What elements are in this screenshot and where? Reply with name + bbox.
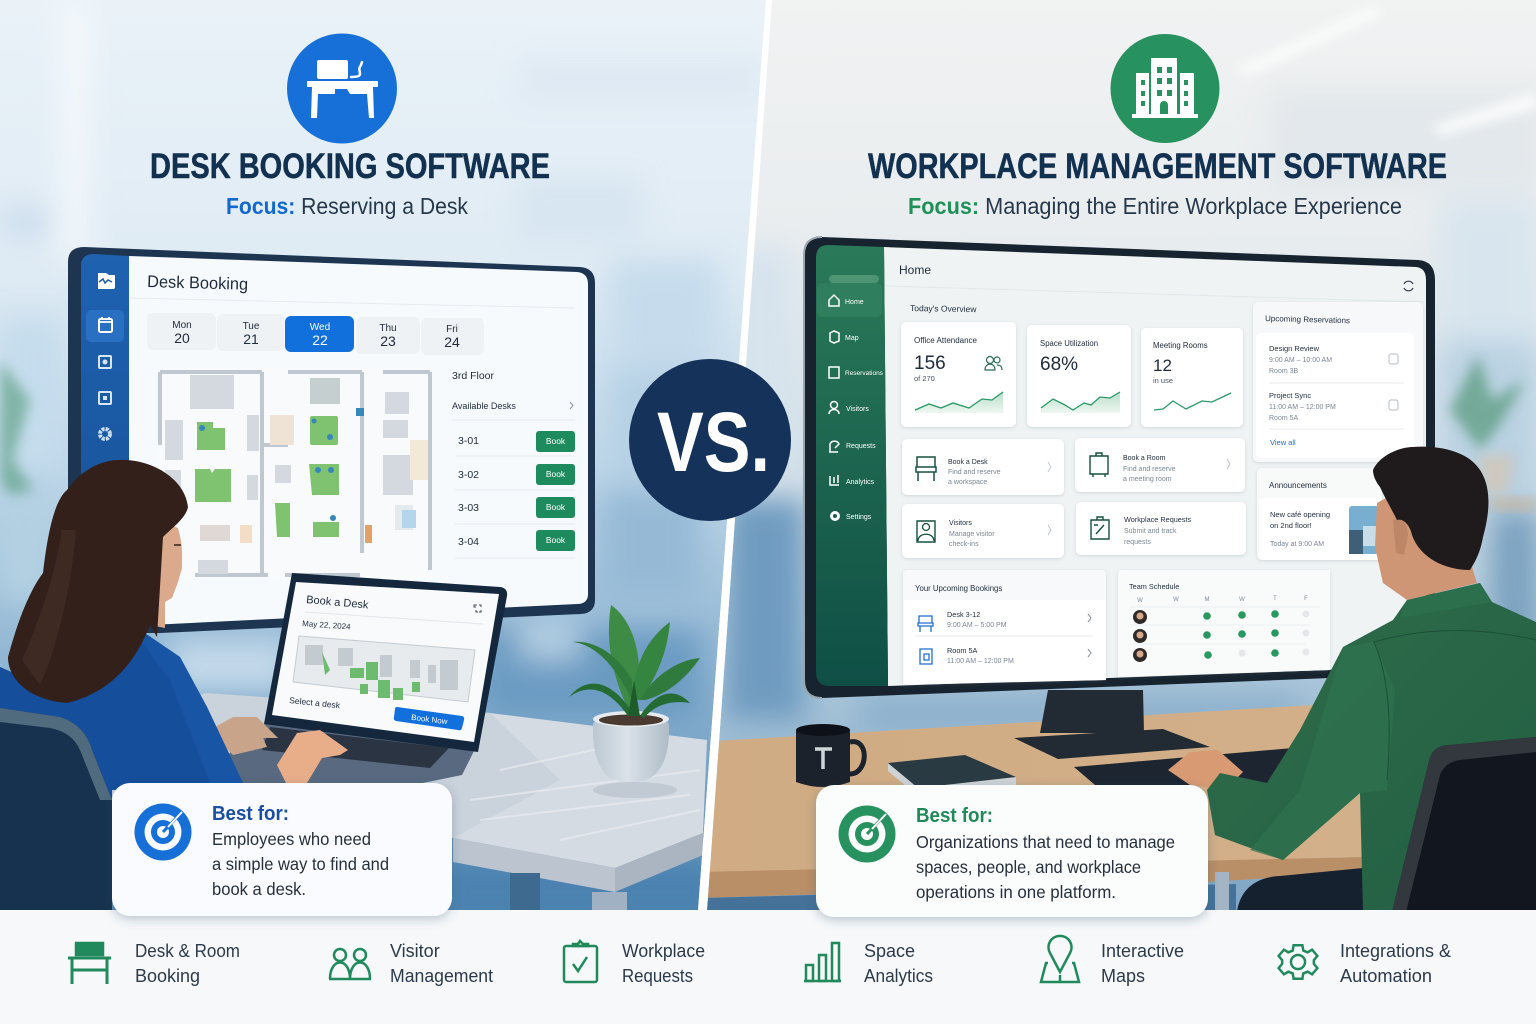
icon: people (329, 949, 371, 979)
hand (1168, 750, 1243, 790)
card: space utilization: 68% (1040, 354, 1078, 375)
monitor frame (68, 247, 595, 633)
title block: desk booking (150, 34, 550, 219)
date selector: Tue (243, 321, 260, 332)
office chair (0, 708, 112, 920)
card: space utilization: Space Utilization (1040, 339, 1098, 348)
icon: building in green circle (1110, 34, 1220, 143)
panel: upcoming reservations: Room 5A (1269, 415, 1299, 422)
icon: gear (1279, 945, 1317, 979)
panel: upcoming reservations: Room 3B (1269, 368, 1299, 375)
floor plan (159, 368, 432, 578)
panel: your upcoming bookings: 9:00 AM – 5:00 PM (947, 622, 1007, 629)
sidebar (816, 245, 888, 686)
office chair (1392, 737, 1536, 912)
date selector (147, 313, 484, 355)
versus badge: VS. (657, 395, 770, 489)
monitor: desk booking app (68, 247, 595, 633)
action: visitors: check-ins (949, 541, 979, 548)
feature: visitor management: Visitor (390, 941, 440, 961)
feature: desk and room booking: Booking (135, 966, 200, 986)
footer strip (0, 910, 1536, 1024)
action: visitors: Visitors (949, 520, 972, 527)
booking list: 3-04 (458, 536, 479, 548)
icon: desk in blue circle (287, 34, 397, 144)
booking list: 3-03 (458, 502, 479, 514)
panel: your upcoming bookings: 11:00 AM – 12:00 PM (947, 658, 1014, 665)
action: visitors: Manage visitor (949, 531, 995, 538)
date selector: 22 (312, 332, 328, 348)
action: book a room: a meeting room (1123, 476, 1172, 483)
booking list: Available Desks (452, 401, 516, 411)
panel: your upcoming bookings (903, 570, 1106, 685)
laptop screen (264, 573, 507, 752)
subheading: focus: Focus: Managing the Entire Workplace Experience (908, 193, 1402, 219)
laptop book now button (394, 707, 464, 730)
booking list: 3-01 (458, 435, 479, 447)
panel: upcoming reservations: View all (1270, 438, 1296, 447)
panel: upcoming reservations: Project Sync (1269, 391, 1311, 400)
panel: your upcoming bookings: Your Upcoming Bookings (915, 584, 1002, 593)
action: workplace requests: Workplace Requests (1124, 515, 1192, 524)
date selector: Mon (172, 320, 192, 331)
feature: workplace requests: Workplace (622, 941, 705, 961)
panel: team schedule: M (1204, 597, 1210, 603)
callout text: Employees who need (212, 829, 371, 849)
action: visitors (902, 504, 1064, 558)
panel: upcoming reservations: Design Review (1269, 344, 1320, 353)
action: workplace requests: requests (1124, 539, 1151, 546)
panel: upcoming reservations: 9:00 AM – 10:00 AM (1269, 357, 1332, 364)
sidebar (81, 254, 129, 626)
monitor frame (804, 237, 1435, 698)
laptop: Select a desk (289, 695, 341, 710)
feature: space analytics (804, 941, 933, 986)
card: announcements: on 2nd floor! (1270, 521, 1312, 530)
icon: green target (838, 806, 896, 862)
booking list: Book (546, 469, 566, 479)
callout text: book a desk. (212, 879, 306, 899)
callout text: Best for: (916, 805, 993, 827)
front hand (277, 730, 348, 783)
panel: team schedule: T (1273, 596, 1277, 602)
plant on table (569, 605, 700, 798)
panel: upcoming reservations: 11:00 AM – 12:00 PM (1269, 404, 1336, 411)
booking list: Book (546, 502, 566, 512)
title block: workplace management (868, 34, 1447, 219)
date selector: Fri (446, 324, 458, 335)
sidebar: Settings (846, 514, 872, 521)
icon: bar chart (804, 943, 841, 981)
feature: visitor management: Management (390, 966, 493, 986)
action: book a room: Find and reserve (1123, 466, 1176, 473)
laptop base (225, 723, 477, 785)
table (112, 693, 707, 868)
panel: team schedule (1118, 570, 1330, 677)
panel: team schedule: Team Schedule (1129, 582, 1179, 591)
panel: upcoming reservations (1253, 302, 1423, 462)
action: book a room: Book a Room (1123, 455, 1166, 462)
booking list: 3-02 (458, 469, 479, 481)
card: space utilization (1027, 325, 1131, 427)
callout text (212, 803, 389, 899)
laptop (225, 573, 507, 785)
versus badge (629, 359, 791, 521)
card: office attendance: Office Attendance (914, 336, 978, 345)
feature: integrations and automation: Integrations & (1340, 941, 1451, 961)
sidebar: Home (845, 299, 864, 306)
callout text: a simple way to find and (212, 854, 389, 874)
booking list (452, 370, 575, 558)
callout text: Best for: (212, 803, 289, 825)
face and neck (150, 520, 182, 628)
screen (884, 247, 1426, 686)
booking list: Book (546, 436, 566, 446)
panel: workplace management office background (700, 0, 1536, 912)
callout: best for employees (112, 783, 452, 916)
sidebar: Map (845, 335, 859, 342)
laptop: Book a Desk (306, 594, 369, 611)
feature: space analytics: Analytics (864, 966, 933, 986)
feature: interactive maps: Interactive (1101, 941, 1184, 961)
date selector: 21 (243, 331, 259, 347)
callout text: spaces, people, and workplace (916, 857, 1141, 877)
person: man at monitor (1168, 447, 1536, 912)
action: book a desk (902, 439, 1064, 495)
shirt (0, 623, 298, 920)
sidebar: Reservations (845, 370, 884, 377)
panel: team schedule: W (1173, 597, 1179, 603)
feature: integrations and automation (1279, 941, 1451, 986)
feature: integrations and automation: Automation (1340, 966, 1432, 986)
app heading: Desk Booking (147, 272, 248, 294)
date selector: Thu (379, 323, 397, 334)
neck and face (1375, 490, 1477, 600)
feature: visitor management (329, 941, 493, 986)
action: book a desk: Find and reserve (948, 469, 1001, 476)
icon: desk (68, 943, 111, 984)
person: woman at laptop (0, 460, 348, 920)
card: office attendance (901, 322, 1016, 427)
monitor stand (1014, 690, 1210, 759)
card: meeting rooms: in use (1153, 376, 1173, 385)
card: announcements: Today at 9:00 AM (1270, 541, 1324, 548)
divider between sides (698, 0, 772, 910)
card: meeting rooms (1141, 328, 1243, 427)
callout text: Organizations that need to manage (916, 832, 1175, 852)
card: office attendance: of 270 (914, 374, 935, 383)
app heading: Home (899, 263, 931, 277)
laptop mini map (293, 636, 475, 702)
heading: DESK BOOKING SOFTWARE (150, 147, 550, 186)
icon: map pin (1041, 936, 1079, 982)
panel: team schedule: F (1304, 596, 1308, 602)
feature: workplace requests (564, 941, 705, 986)
panel: team schedule: W (1239, 597, 1245, 603)
date selector: 20 (174, 330, 190, 346)
feature: space analytics: Space (864, 941, 915, 961)
card: announcements: Announcements (1269, 481, 1327, 490)
ear (1393, 519, 1408, 555)
desk (700, 705, 1400, 872)
card: announcements: New café opening (1270, 510, 1330, 519)
action: book a desk: a workspace (948, 479, 987, 486)
sidebar: Analytics (846, 479, 875, 486)
callout: best for organizations (816, 785, 1208, 917)
monitor: workplace app stand and frame: Today's Overview (910, 303, 977, 314)
date selector: Wed (310, 322, 330, 333)
panel: upcoming reservations: Upcoming Reservations (1265, 314, 1350, 325)
screen (129, 256, 588, 626)
panel: team schedule: W (1137, 598, 1143, 604)
hair (8, 460, 188, 703)
coffee mug (796, 724, 864, 787)
keyboard (1074, 748, 1293, 785)
date selector: 24 (444, 334, 460, 350)
icon: clipboard check (564, 941, 597, 982)
shirt (1207, 583, 1536, 912)
action: book a desk: Book a Desk (948, 459, 988, 466)
legs (1237, 868, 1363, 912)
panel: desk booking office background (0, 0, 770, 930)
feature: desk and room booking (68, 941, 240, 986)
monitor: workplace app stand and frame (804, 237, 1435, 759)
action: workplace requests (1076, 502, 1246, 555)
laptop: Book Now (411, 713, 448, 726)
notebook (888, 755, 1016, 796)
callout text (916, 805, 1175, 902)
icon: blue target (134, 804, 192, 860)
laptop: May 22, 2024 (302, 619, 351, 631)
booking list: Book (546, 535, 566, 545)
callout text: operations in one platform. (916, 882, 1116, 902)
card: office attendance: 156 (914, 353, 946, 374)
feature: interactive maps: Maps (1101, 966, 1145, 986)
booking list: 3rd Floor (452, 370, 495, 382)
date selector: 23 (380, 333, 396, 349)
back hand (215, 717, 278, 755)
sidebar: Requests (846, 443, 876, 450)
action: book a room (1075, 438, 1245, 492)
card: announcements (1257, 468, 1382, 560)
sidebar: Visitors (846, 406, 869, 413)
feature: workplace requests: Requests (622, 966, 693, 986)
feature: desk and room booking: Desk & Room (135, 941, 240, 961)
feature: interactive maps (1041, 936, 1184, 986)
subheading: focus: Focus: Reserving a Desk (226, 193, 468, 219)
action: workplace requests: Submit and track (1124, 528, 1177, 535)
card: meeting rooms: Meeting Rooms (1153, 341, 1208, 350)
card: meeting rooms: 12 (1153, 356, 1172, 375)
panel: your upcoming bookings: Desk 3-12 (947, 610, 980, 619)
panel: your upcoming bookings: Room 5A (947, 646, 978, 655)
hair (1373, 447, 1488, 570)
